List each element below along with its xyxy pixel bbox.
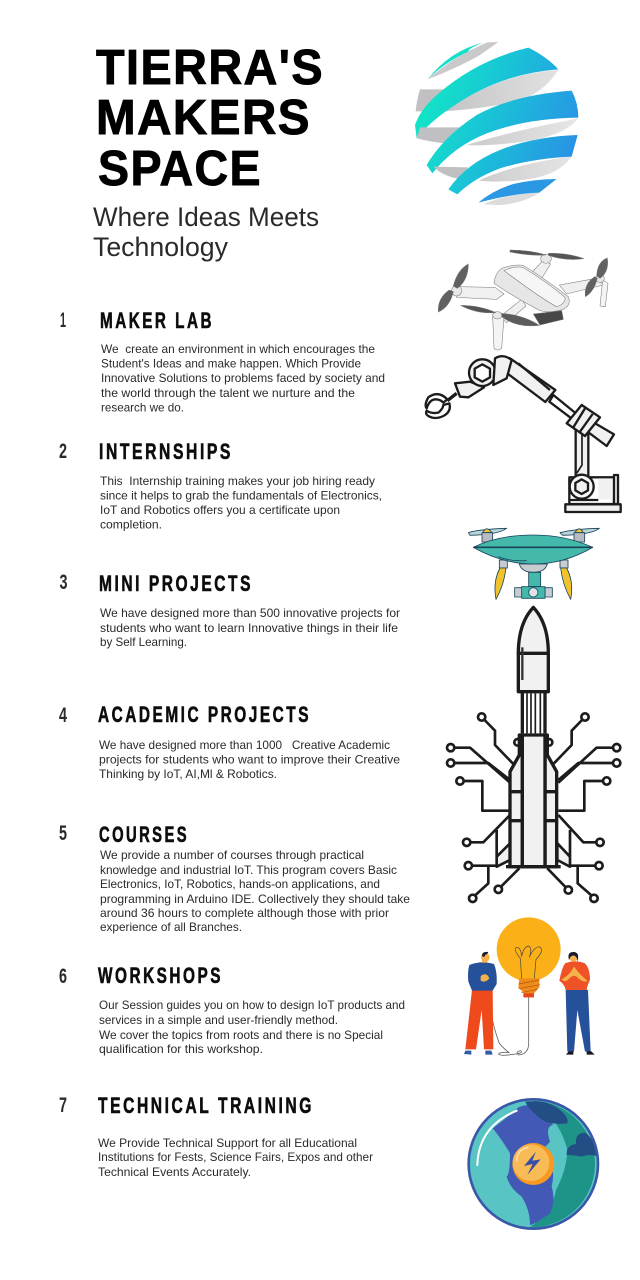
section 4: academic projects: projects for students who want to improve their Creative xyxy=(99,754,400,766)
icon: people with light bulb xyxy=(464,917,595,1055)
section 4: academic projects: ACADEMIC PROJECTS xyxy=(98,702,311,727)
subtitle: Where Ideas Meets xyxy=(93,202,319,232)
section 7: technical training: 7 xyxy=(59,1094,67,1117)
icon: grey quadcopter drone xyxy=(438,250,608,350)
woman xyxy=(566,990,591,1052)
section 3: mini projects xyxy=(60,571,400,649)
section 2: internships: since it helps to grab the fundamentals of Electronics, xyxy=(100,490,382,502)
icon: rocket with circuit traces xyxy=(447,607,620,902)
section 2: internships: INTERNSHIPS xyxy=(99,439,233,464)
section 1: maker lab xyxy=(60,308,385,414)
section 3: mini projects: 3 xyxy=(60,571,68,594)
section 3: mini projects: by Self Learning. xyxy=(100,636,187,649)
subtitle: Technology xyxy=(93,232,229,262)
bulb xyxy=(497,917,561,981)
section 7: technical training: TECHNICAL TRAINING xyxy=(98,1093,314,1118)
icon: robotic arm xyxy=(426,356,621,512)
title: MAKERS xyxy=(96,91,311,145)
section 3: mini projects: MINI PROJECTS xyxy=(99,571,253,596)
section 6: workshops xyxy=(59,963,405,1056)
section 5: courses: COURSES xyxy=(99,822,189,847)
section 6: workshops: qualification for this workshop. xyxy=(99,1043,263,1056)
section 6: workshops: Our Session guides you on how to design IoT products and xyxy=(99,999,405,1012)
section 2: internships: This Internship training makes your job hiring ready xyxy=(100,475,375,488)
title: SPACE xyxy=(98,142,262,196)
section 1: maker lab: 1 xyxy=(60,309,66,332)
section 6: workshops: services in a simple and user-friendly method. xyxy=(99,1014,338,1027)
section 7: technical training: We Provide Technical Support for all Educational xyxy=(98,1137,357,1150)
section 1: maker lab: research we do. xyxy=(101,402,184,414)
section 5: courses: around 36 hours to complete although those with prior xyxy=(100,907,389,920)
section 5: courses: knowledge and industrial IoT. This program covers Basic xyxy=(100,864,397,877)
section 5: courses: Electronics, IoT, Robotics, hands-on applications, and xyxy=(100,878,380,891)
section 2: internships: IoT and Robotics offers you a certificate upon xyxy=(100,504,340,517)
section 5: courses: programming in Arduino IDE. Collectively they should take xyxy=(100,893,410,906)
section 2: internships xyxy=(59,439,382,532)
section 1: maker lab: MAKER LAB xyxy=(100,308,214,333)
section 4: academic projects: We have designed more than 1000 Creative Academic xyxy=(99,739,390,752)
section 4: academic projects: 4 xyxy=(59,704,67,727)
section 4: academic projects: Thinking by IoT, AI,Ml & Robotics. xyxy=(99,768,277,781)
section 5: courses: experience of all Branches. xyxy=(100,921,242,934)
section 5: courses: We provide a number of courses through practical xyxy=(100,849,364,862)
section 4: academic projects xyxy=(59,702,400,781)
section 7: technical training xyxy=(59,1093,373,1179)
section 6: workshops: We cover the topics from roots and there is no Special xyxy=(99,1029,383,1042)
section 1: maker lab: We create an environment in which encourages the xyxy=(101,343,375,356)
section 2: internships: completion. xyxy=(100,518,162,532)
section 6: workshops: 6 xyxy=(59,965,67,988)
section 3: mini projects: students who want to learn Innovative things in their life xyxy=(100,622,398,635)
icon: teal camera drone xyxy=(468,528,599,599)
section 3: mini projects: We have designed more than 500 innovative projects for xyxy=(100,607,400,620)
man xyxy=(465,990,493,1049)
title: TIERRA'S xyxy=(96,41,324,95)
section 1: maker lab: Innovative Solutions to problems faced by society and xyxy=(101,372,385,385)
icon: earth globe with energy bolt xyxy=(469,1099,598,1229)
section 5: courses xyxy=(59,822,410,934)
section 5: courses: 5 xyxy=(59,822,67,845)
section 6: workshops: WORKSHOPS xyxy=(98,963,223,988)
section 7: technical training: Technical Events Accurately. xyxy=(98,1166,251,1179)
title xyxy=(96,41,324,196)
section 7: technical training: Institutions for Fests, Science Fairs, Expos and other xyxy=(98,1151,373,1164)
section 2: internships: 2 xyxy=(59,440,67,463)
section 1: maker lab: the world through the talent we nurture and the xyxy=(101,387,355,400)
subtitle xyxy=(93,202,319,262)
section 1: maker lab: Student's Ideas and make happen. Which Provide xyxy=(101,358,361,371)
icon: striped globe logo xyxy=(415,42,578,205)
circuit traces xyxy=(447,713,620,902)
wire xyxy=(487,992,529,1055)
